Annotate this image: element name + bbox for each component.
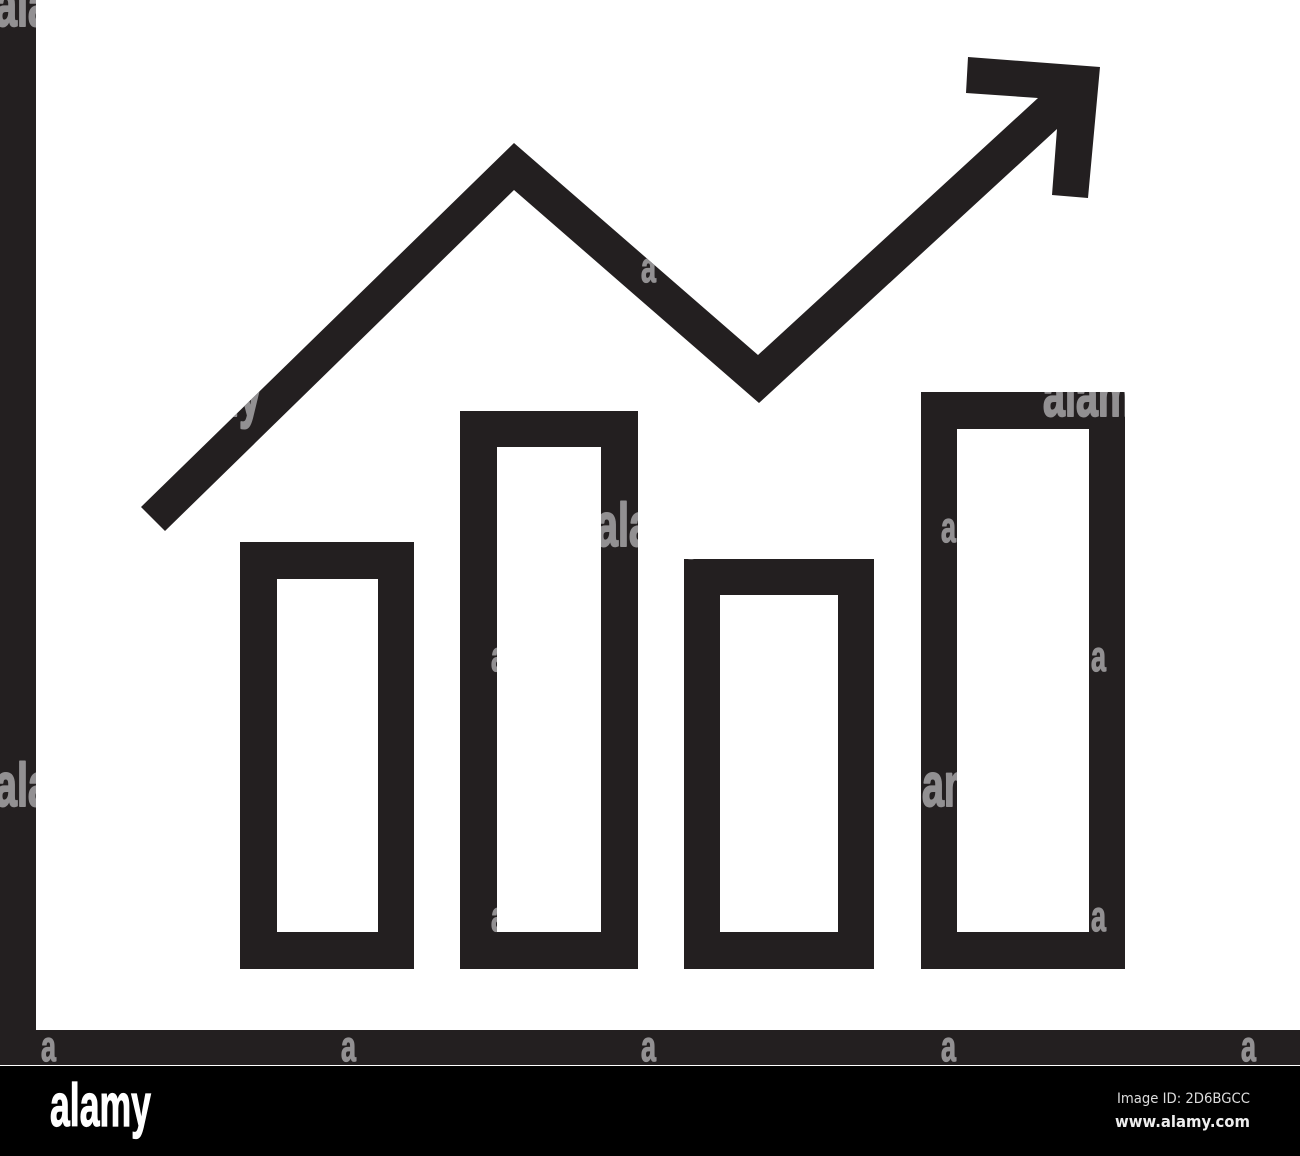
image id: Image ID: 2D6BGCC [1117, 1091, 1250, 1107]
watermark lettering clipped to dark shapes: a [491, 893, 507, 941]
rising trend arrow [141, 57, 1100, 531]
watermark lettering clipped to dark shapes: a [941, 1023, 957, 1071]
alamy logo: alamy [50, 1072, 151, 1139]
bar 4 [921, 392, 1125, 969]
watermark lettering clipped to dark shapes: alamy [889, 751, 1001, 819]
bar 3 [684, 559, 874, 969]
watermark lettering clipped to dark shapes: a [41, 1023, 57, 1071]
watermark lettering clipped to dark shapes: a [941, 504, 957, 552]
watermark lettering clipped to dark shapes: alamy [596, 491, 708, 559]
watermark lettering clipped to dark shapes: alamy [1043, 361, 1155, 429]
watermark lettering clipped to dark shapes: a [641, 1023, 657, 1071]
watermark lettering clipped to dark shapes: a [1241, 1023, 1257, 1071]
watermark lettering clipped to dark shapes: a [1091, 893, 1107, 941]
bar 1 [240, 542, 414, 969]
website: www.alamy.com [1115, 1112, 1250, 1131]
watermark lettering clipped to dark shapes: a [641, 244, 657, 292]
watermark lettering clipped to dark shapes: a [491, 633, 507, 681]
watermark lettering clipped to dark shapes: a [1091, 633, 1107, 681]
watermark lettering clipped to dark shapes: alamy [149, 361, 261, 429]
watermark lettering clipped to dark shapes: a [341, 1023, 357, 1071]
watermark lettering clipped to dark shapes: alamy [0, 751, 107, 819]
bar 2 [460, 411, 638, 969]
footer band [0, 1066, 1300, 1156]
